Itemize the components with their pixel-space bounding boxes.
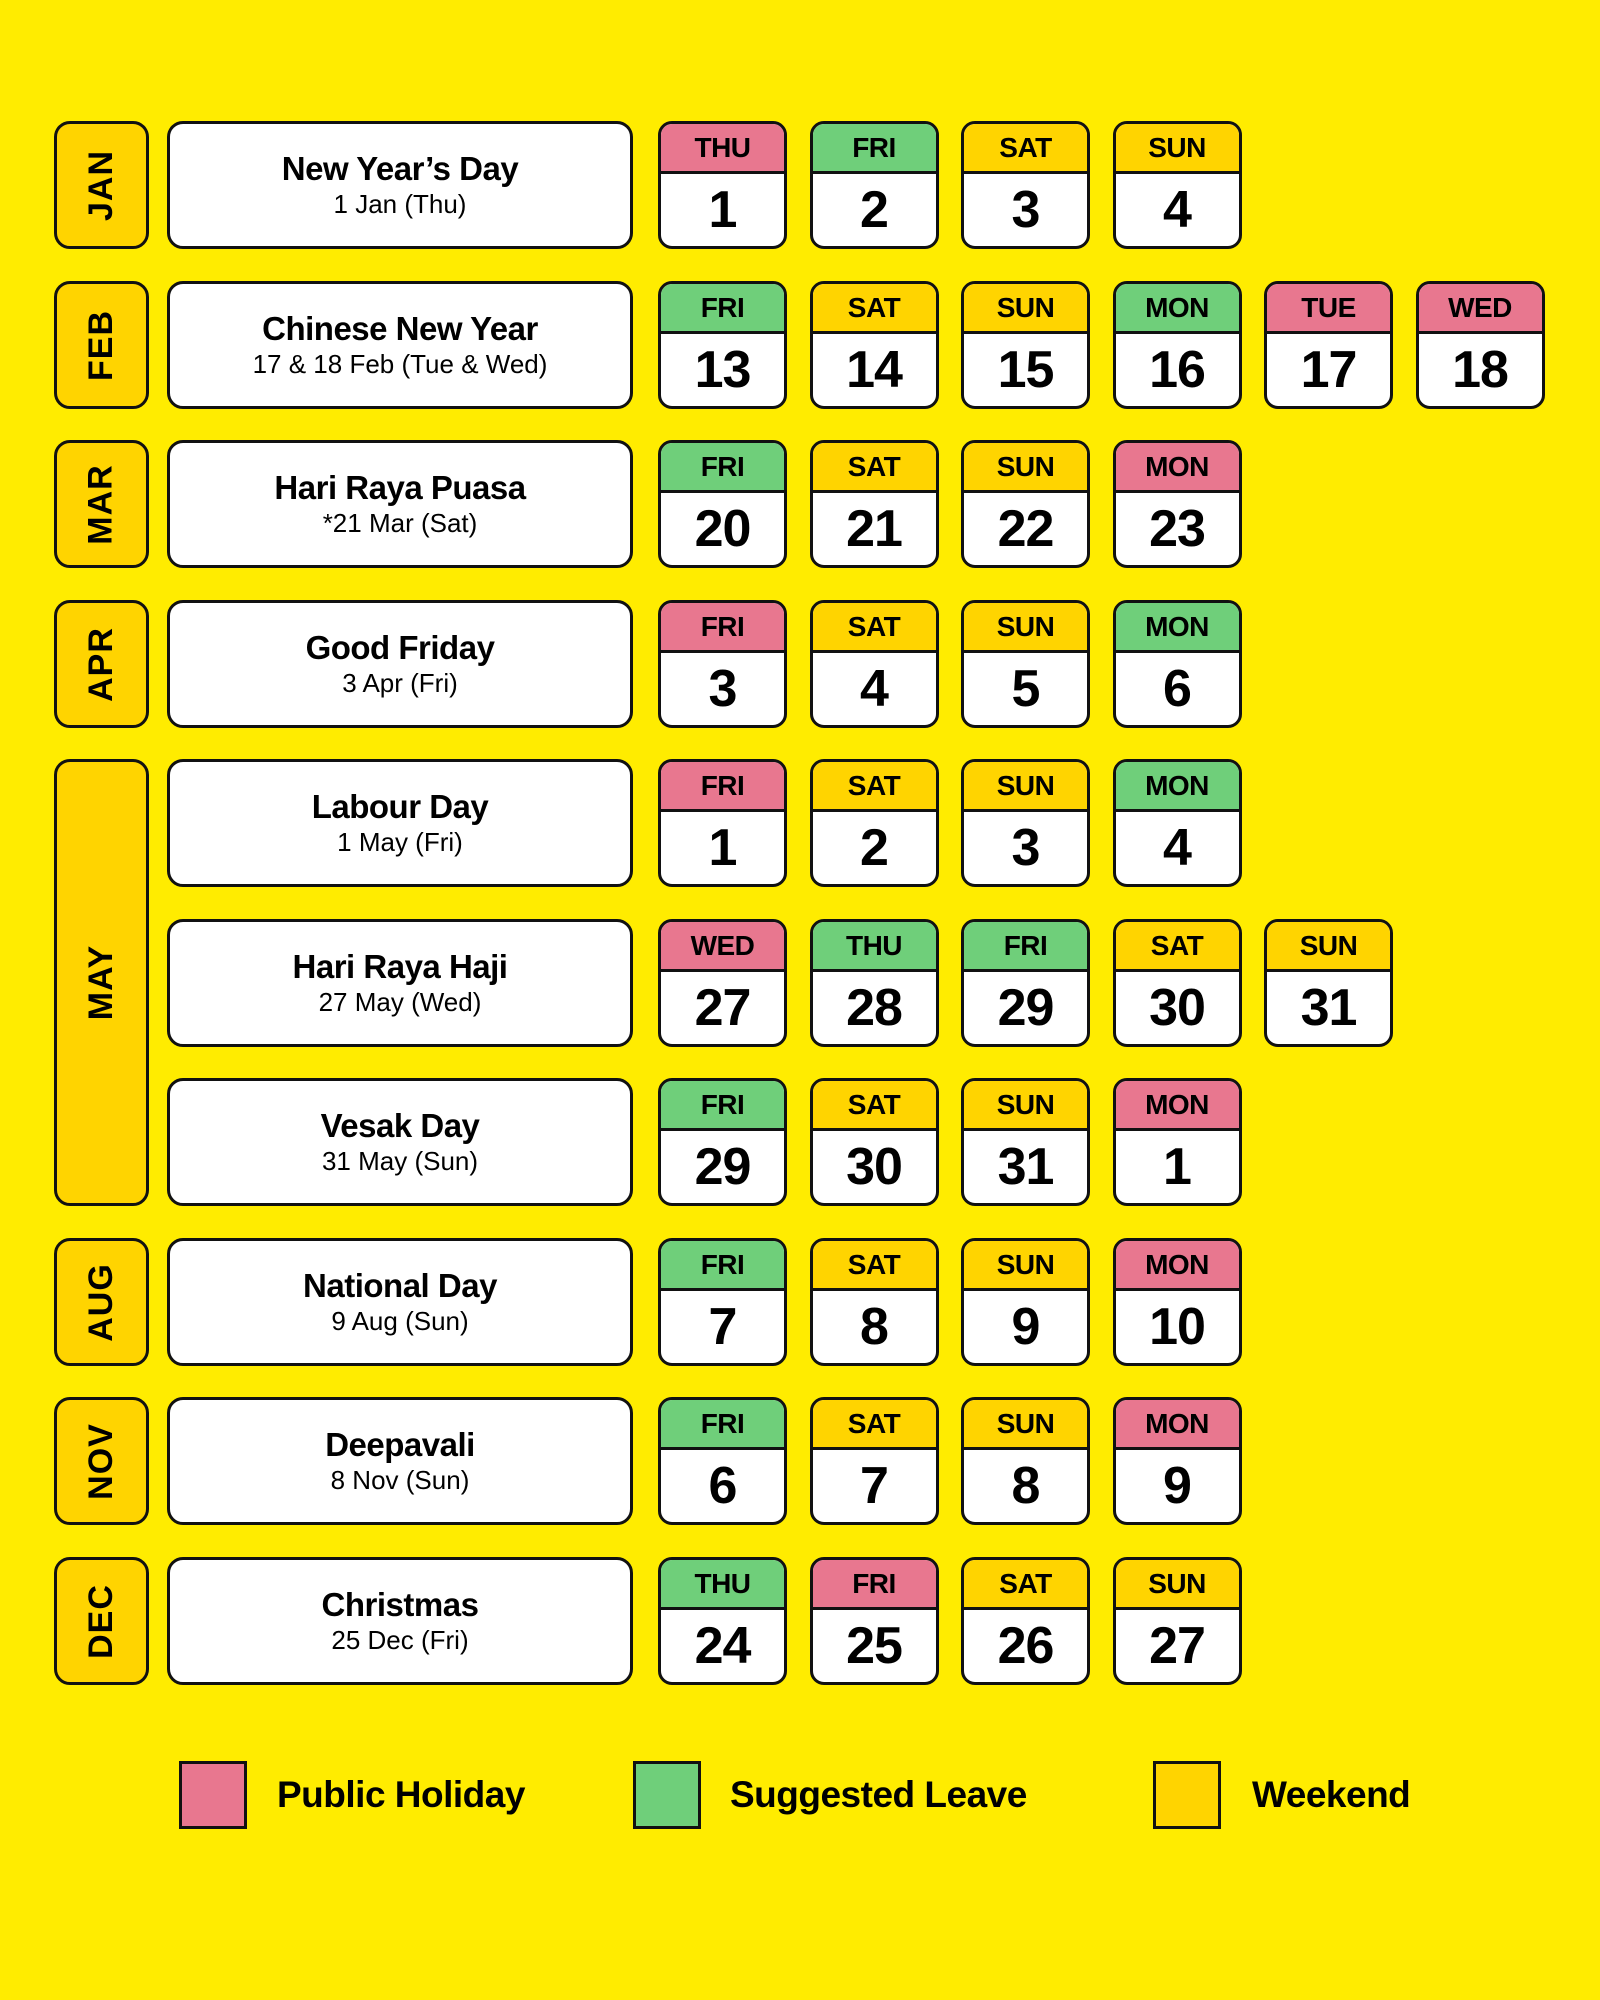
days: Hari Raya Haji: SAT bbox=[1151, 930, 1203, 960]
tab: JAN bbox=[54, 121, 149, 249]
days: AUG: 9 bbox=[1012, 1298, 1039, 1356]
days: APR bbox=[658, 600, 1242, 728]
holiday: Labour Day bbox=[167, 759, 633, 887]
days: DEC: 24 bbox=[695, 1617, 750, 1675]
holiday: Deepavali: 8 Nov (Sun) bbox=[331, 1465, 469, 1495]
days: Hari Raya Haji: 30 bbox=[1149, 979, 1205, 1037]
days: JAN: 3 bbox=[1012, 181, 1039, 239]
days: AUG: 8 bbox=[860, 1298, 888, 1356]
tab: AUG: AUG bbox=[82, 1263, 120, 1341]
days: Labour Day: 2 bbox=[860, 819, 888, 877]
days: FEB: FRI bbox=[701, 292, 744, 322]
days: JAN: 4 bbox=[1163, 181, 1191, 239]
days: MAR: MON bbox=[1145, 450, 1209, 482]
holiday: Christmas: 25 Dec (Fri) bbox=[331, 1625, 469, 1655]
days: NOV: FRI bbox=[701, 1408, 744, 1438]
holiday: Vesak Day: 31 May (Sun) bbox=[322, 1146, 478, 1176]
tab: JAN: JAN bbox=[82, 149, 120, 221]
holiday: Good Friday: 3 Apr (Fri) bbox=[342, 668, 458, 698]
days: DEC: THU bbox=[694, 1568, 751, 1598]
days: FEB: 15 bbox=[998, 341, 1053, 399]
days: Vesak Day: 1 bbox=[1163, 1138, 1191, 1196]
days: JAN: THU bbox=[694, 132, 751, 162]
days: Vesak Day: SAT bbox=[848, 1088, 900, 1120]
days: JAN: 2 bbox=[860, 181, 888, 239]
days: FEB: MON bbox=[1145, 292, 1209, 322]
days: DEC: SAT bbox=[999, 1568, 1052, 1598]
days: NOV: 6 bbox=[709, 1457, 736, 1515]
days: DEC: SUN bbox=[1148, 1568, 1206, 1598]
days: DEC bbox=[658, 1557, 1242, 1685]
tab: NOV: NOV bbox=[82, 1423, 120, 1499]
tab: APR bbox=[54, 600, 149, 728]
days: Labour Day: SUN bbox=[997, 770, 1054, 800]
days: AUG: FRI bbox=[701, 1248, 744, 1280]
holiday: Hari Raya Haji: 27 May (Wed) bbox=[319, 987, 481, 1017]
holiday: Good Friday: Good Friday bbox=[306, 629, 494, 666]
holiday: Deepavali bbox=[167, 1397, 633, 1525]
days: NOV: 8 bbox=[1012, 1457, 1039, 1515]
days: Vesak Day bbox=[658, 1078, 1242, 1206]
holiday: National Day: National Day bbox=[303, 1267, 497, 1304]
days: Vesak Day: 31 bbox=[998, 1138, 1053, 1196]
days: MAR: 23 bbox=[1149, 500, 1205, 558]
tab: DEC bbox=[54, 1557, 149, 1685]
days: Labour Day: 1 bbox=[709, 819, 736, 877]
days: MAR: SUN bbox=[997, 450, 1054, 482]
legend swatch: weekend bbox=[1153, 1761, 1221, 1829]
tab: MAY bbox=[54, 759, 149, 1206]
days: APR: 4 bbox=[860, 660, 888, 718]
days: AUG bbox=[658, 1238, 1242, 1366]
holiday: New Year's Day bbox=[167, 121, 633, 249]
days: Hari Raya Haji: 27 bbox=[695, 979, 750, 1037]
holiday: New Year's Day: 1 Jan (Thu) bbox=[334, 189, 466, 219]
days: FEB: 13 bbox=[695, 341, 750, 399]
days: APR: FRI bbox=[701, 610, 744, 642]
days: DEC: 26 bbox=[998, 1617, 1053, 1675]
holiday: Christmas bbox=[167, 1557, 633, 1685]
days: Labour Day: FRI bbox=[701, 770, 744, 800]
holiday: Chinese New Year bbox=[167, 281, 633, 409]
tab: MAY: MAY bbox=[82, 945, 120, 1020]
tab: FEB: FEB bbox=[82, 310, 120, 380]
days: APR: SAT bbox=[848, 610, 900, 642]
days: Labour Day: 3 bbox=[1012, 819, 1039, 877]
days: JAN: 1 bbox=[709, 181, 736, 239]
holiday: New Year's Day: New Year’s Day bbox=[282, 150, 518, 187]
legend label: suggested leave: Suggested Leave bbox=[730, 1774, 1027, 1815]
days: APR: 5 bbox=[1012, 660, 1039, 718]
holiday: Hari Raya Puasa bbox=[167, 440, 633, 568]
days: MAR: 22 bbox=[998, 500, 1053, 558]
holiday: Vesak Day: Vesak Day bbox=[321, 1107, 479, 1144]
days: FEB: 14 bbox=[846, 341, 902, 399]
days: Hari Raya Haji bbox=[658, 919, 1393, 1047]
days: NOV: MON bbox=[1145, 1408, 1209, 1438]
days: NOV: SAT bbox=[848, 1408, 900, 1438]
days: NOV: 9 bbox=[1163, 1457, 1191, 1515]
days: MAR: FRI bbox=[701, 450, 744, 482]
days: FEB: 17 bbox=[1301, 341, 1356, 399]
holiday: Hari Raya Puasa: Hari Raya Puasa bbox=[274, 469, 526, 506]
tab: APR: APR bbox=[82, 627, 120, 701]
tab: MAR: MAR bbox=[82, 464, 120, 544]
days: Hari Raya Haji: 29 bbox=[998, 979, 1053, 1037]
days: MAR: 20 bbox=[695, 500, 750, 558]
holiday: National Day: 9 Aug (Sun) bbox=[331, 1306, 469, 1336]
days: AUG: 7 bbox=[709, 1298, 736, 1356]
holiday: Chinese New Year: Chinese New Year bbox=[262, 310, 538, 347]
holiday: Labour Day: Labour Day bbox=[312, 788, 488, 825]
days: JAN bbox=[658, 121, 1242, 249]
days: DEC: FRI bbox=[852, 1568, 896, 1598]
days: Labour Day: SAT bbox=[848, 770, 900, 800]
days: NOV: SUN bbox=[997, 1408, 1054, 1438]
days: Labour Day: MON bbox=[1145, 770, 1209, 800]
tab: MAR bbox=[54, 440, 149, 568]
days: APR: 3 bbox=[709, 660, 736, 718]
days: Vesak Day: FRI bbox=[701, 1088, 744, 1120]
days: FEB: WED bbox=[1448, 292, 1512, 322]
days: FEB: 18 bbox=[1452, 341, 1508, 399]
days: Hari Raya Haji: WED bbox=[691, 930, 754, 960]
days: NOV bbox=[658, 1397, 1242, 1525]
holiday: Hari Raya Haji: Hari Raya Haji bbox=[293, 948, 507, 985]
days: Vesak Day: MON bbox=[1145, 1088, 1209, 1120]
days: Labour Day: 4 bbox=[1163, 819, 1191, 877]
days: APR: 6 bbox=[1163, 660, 1191, 718]
days: MAR: SAT bbox=[848, 450, 900, 482]
legend label: weekend: Weekend bbox=[1252, 1774, 1410, 1815]
holiday: Hari Raya Haji bbox=[167, 919, 633, 1047]
days: JAN: SUN bbox=[1148, 132, 1206, 162]
days: APR: SUN bbox=[997, 610, 1054, 642]
holiday: National Day bbox=[167, 1238, 633, 1366]
days: DEC: 27 bbox=[1149, 1617, 1205, 1675]
days: AUG: SAT bbox=[848, 1248, 900, 1280]
tab: FEB bbox=[54, 281, 149, 409]
days: Hari Raya Haji: SUN bbox=[1300, 930, 1357, 960]
days: MAR: 21 bbox=[846, 500, 902, 558]
days: Labour Day bbox=[658, 759, 1242, 887]
days: DEC: 25 bbox=[846, 1617, 902, 1675]
days: Hari Raya Haji: FRI bbox=[1004, 930, 1047, 960]
legend swatch: suggested leave bbox=[633, 1761, 701, 1829]
tab: NOV bbox=[54, 1397, 149, 1525]
days: Hari Raya Haji: 28 bbox=[846, 979, 902, 1037]
days: Vesak Day: SUN bbox=[997, 1088, 1054, 1120]
holiday: Christmas: Christmas bbox=[322, 1586, 478, 1623]
legend swatch: public holiday bbox=[179, 1761, 247, 1829]
days: AUG: MON bbox=[1145, 1248, 1209, 1280]
days: Hari Raya Haji: 31 bbox=[1301, 979, 1356, 1037]
days: Vesak Day: 30 bbox=[846, 1138, 902, 1196]
days: AUG: SUN bbox=[997, 1248, 1054, 1280]
holiday: Labour Day: 1 May (Fri) bbox=[337, 827, 463, 857]
days: FEB: TUE bbox=[1301, 292, 1356, 322]
holiday: Vesak Day bbox=[167, 1078, 633, 1206]
days: FEB bbox=[658, 281, 1545, 409]
days: FEB: SAT bbox=[848, 292, 900, 322]
days: Vesak Day: 29 bbox=[695, 1138, 750, 1196]
legend bbox=[179, 1761, 1410, 1829]
days: Hari Raya Haji: THU bbox=[846, 930, 902, 960]
days: JAN: FRI bbox=[852, 132, 896, 162]
days: MAR bbox=[658, 440, 1242, 568]
holiday: Chinese New Year: 17 & 18 Feb (Tue & Wed) bbox=[253, 349, 547, 379]
days: AUG: 10 bbox=[1149, 1298, 1205, 1356]
days: NOV: 7 bbox=[860, 1457, 888, 1515]
holiday: Hari Raya Puasa: *21 Mar (Sat) bbox=[323, 508, 477, 538]
holiday: Deepavali: Deepavali bbox=[325, 1426, 475, 1463]
legend label: public holiday: Public Holiday bbox=[277, 1774, 525, 1815]
tab: DEC: DEC bbox=[82, 1584, 120, 1658]
days: FEB: SUN bbox=[997, 292, 1054, 322]
days: APR: MON bbox=[1145, 610, 1209, 642]
tab: AUG bbox=[54, 1238, 149, 1366]
days: JAN: SAT bbox=[999, 132, 1052, 162]
days: FEB: 16 bbox=[1149, 341, 1205, 399]
holiday: Good Friday bbox=[167, 600, 633, 728]
